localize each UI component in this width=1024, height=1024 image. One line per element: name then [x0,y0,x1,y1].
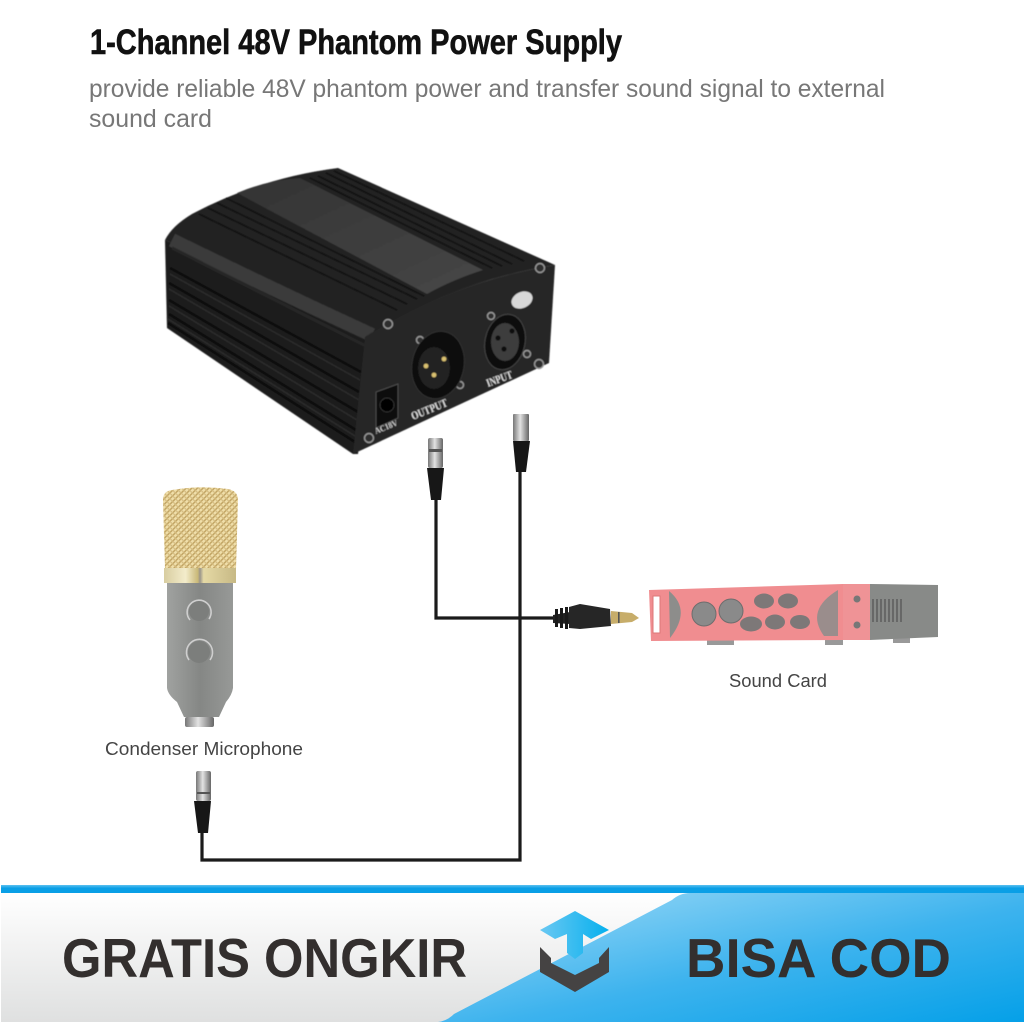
title: 1-Channel 48V Phantom Power Supply [90,23,622,62]
sound card chassis [870,584,938,640]
sound card grey panels [669,591,681,638]
output XLR connector [405,326,471,404]
logo icon [540,911,609,992]
sound card handle slot [653,596,660,633]
banner blue panel [438,893,1024,1022]
AC18V label: AC18V [373,417,400,436]
microphone XLR plug [194,771,211,833]
sound card vents [873,599,901,622]
input XLR connector [480,288,535,374]
sound card label: Sound Card [729,671,827,691]
microphone label: Condenser Microphone [105,739,303,759]
mic knobs [187,600,212,663]
front panel [353,265,555,454]
cable: output to sound card [436,495,556,618]
side face [165,240,370,454]
power jack [376,384,398,428]
subtitle text: sound card [89,105,212,133]
panel screws [364,264,544,442]
sound card feet [707,638,910,645]
banner right text: BISA COD [686,927,951,989]
mic base connector [185,717,214,727]
XLR male plug [513,414,530,472]
subtitle text [89,75,885,133]
sound card inputs [692,599,743,626]
mic mesh head [163,487,238,569]
condenser microphone [163,487,238,727]
input label: INPUT [485,369,515,390]
sound card front panel [649,584,843,641]
top face [165,168,555,346]
mic gold ring [164,568,236,583]
sound card [649,584,938,645]
phantom power supply device [165,168,555,454]
3.5mm jack plug [553,604,639,629]
banner grey panel [1,893,1024,1022]
output label: OUTPUT [410,397,450,423]
mic body [167,583,233,717]
banner top bar [1,885,1024,893]
banner left text: GRATIS ONGKIR [62,927,467,989]
cable: input to microphone [202,470,520,860]
sound card bracket [843,584,870,640]
sound card knobs [740,594,810,632]
subtitle text: provide reliable 48V phantom power and transfer sound signal to external [89,75,885,103]
XLR female plug [427,438,444,500]
promo banner [1,885,1024,1022]
